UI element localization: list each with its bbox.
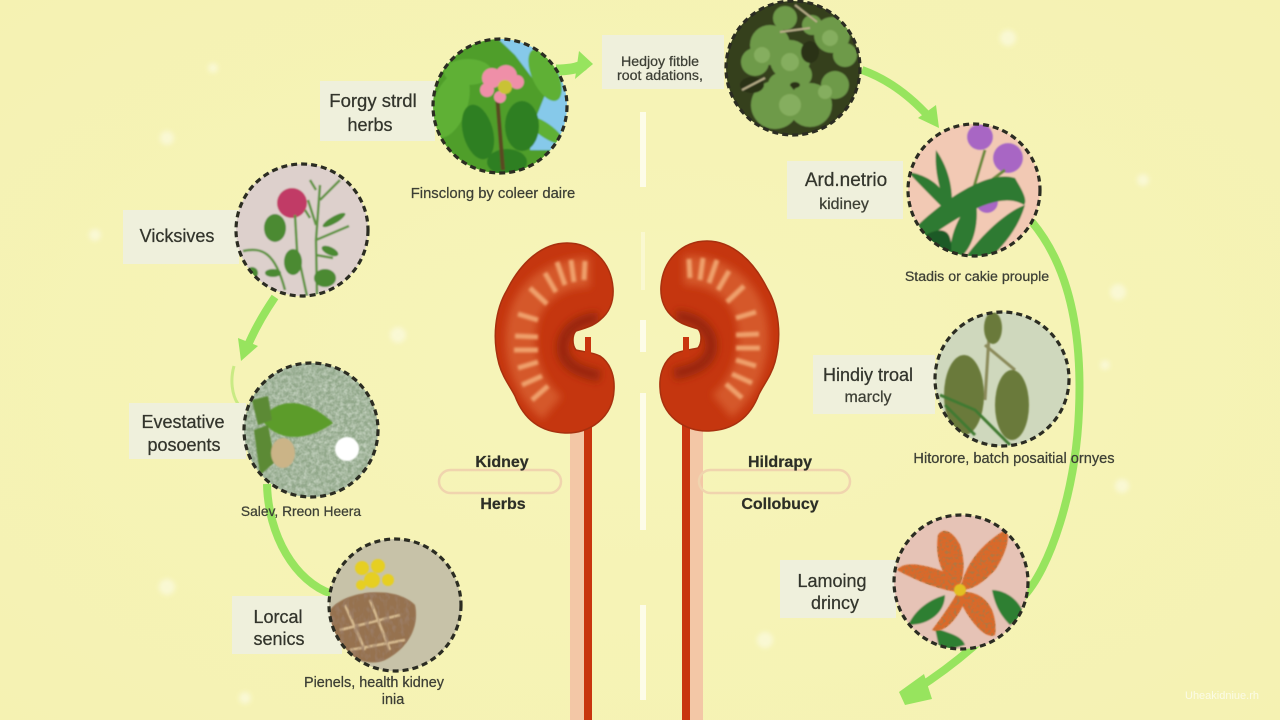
panel: Lorcal senics: [232, 538, 462, 708]
panel: Forgy herbs: herbs: [347, 115, 393, 135]
ring: [244, 363, 378, 497]
panel: Evestative posoents: posoents: [147, 435, 221, 455]
watermark: Uheakidniue.rh: [1185, 690, 1259, 702]
arrow: left lower: [267, 484, 332, 594]
ureter tubes: [570, 425, 703, 720]
panel: Ard.netrio kidney: kidiney: [819, 196, 869, 213]
left pill and labels: [439, 454, 561, 513]
panel: Vicksives: Vicksives: [140, 226, 214, 246]
left pill and labels: Herbs: [480, 496, 526, 513]
left kidney: [495, 243, 614, 433]
ring: [329, 539, 461, 671]
icon: pink flower with leaves: [433, 39, 567, 173]
panel: Hindy troal marcly: Hindiy troal: [823, 365, 913, 385]
arrow: right side long curve: [899, 222, 1079, 705]
caption: Finsclong by coleer daire: [411, 186, 575, 202]
ring: [935, 312, 1069, 446]
caption: Pienels, health kidney: [304, 675, 445, 691]
center dashed line: [640, 112, 646, 700]
arrow: top herb to pink flower: [862, 70, 939, 128]
icon: orange lily: [893, 514, 1029, 652]
panel: top herb: [602, 0, 861, 136]
decorative sparkles: [89, 30, 1149, 704]
ring: [433, 39, 567, 173]
arrow: left upper: [232, 297, 275, 404]
ring: [236, 164, 368, 296]
right pill and labels: [699, 454, 850, 513]
ring: [726, 1, 860, 135]
panel: Lorcal senics: Lorcal: [253, 607, 303, 627]
right kidney: [660, 241, 779, 431]
icon: red flower plant: [235, 163, 370, 298]
panel: Ard.netrio kidney: Ard.netrio: [805, 170, 887, 191]
panel: Vicksives: [123, 163, 370, 298]
panel: Evestative posoents: [129, 362, 379, 519]
caption: Stadis or cakie prouple: [905, 269, 1049, 285]
icon: roots with yellow flowers: [328, 538, 462, 672]
arrow: first circle to top label: [556, 51, 593, 79]
left pill and labels: Kidney: [475, 454, 529, 471]
ring: [908, 124, 1040, 256]
caption: Hitorore, batch posaitial ornyes: [913, 451, 1115, 467]
panel: Lamoing drincy: drincy: [811, 593, 859, 613]
panel: Ard.netrio kidney: [787, 120, 1049, 285]
right pill and labels: Collobucy: [741, 496, 819, 513]
panel: Hindy troal marcly: [813, 311, 1115, 467]
icon: dark green herbs: [725, 0, 861, 136]
panel: top herb: root adations,: [617, 68, 703, 84]
panel: Evestative posoents: Evestative: [141, 412, 225, 432]
caption: Salev, Rreon Heera: [241, 504, 361, 519]
right pill and labels: Hildrapy: [748, 454, 812, 471]
panel: Lorcal senics: inia: [382, 692, 404, 708]
panel: top herb: Hedjoy fitble: [621, 54, 699, 70]
panel: Lamoing drincy: Lamoing: [797, 571, 867, 591]
icon: dried hanging herb: [934, 311, 1070, 447]
panel: Lorcal senics: senics: [253, 629, 305, 649]
icon: leaf on textured ground: [243, 362, 379, 498]
ring: [894, 515, 1028, 649]
panel: Forgy herbs: Forgy strdl: [329, 90, 417, 111]
panel: Forgy herbs: [320, 36, 575, 202]
panel: Lamoing drincy: [780, 514, 1029, 652]
panel: Hindy troal marcly: marcly: [844, 389, 892, 406]
icon: purple flower: [908, 124, 1040, 256]
